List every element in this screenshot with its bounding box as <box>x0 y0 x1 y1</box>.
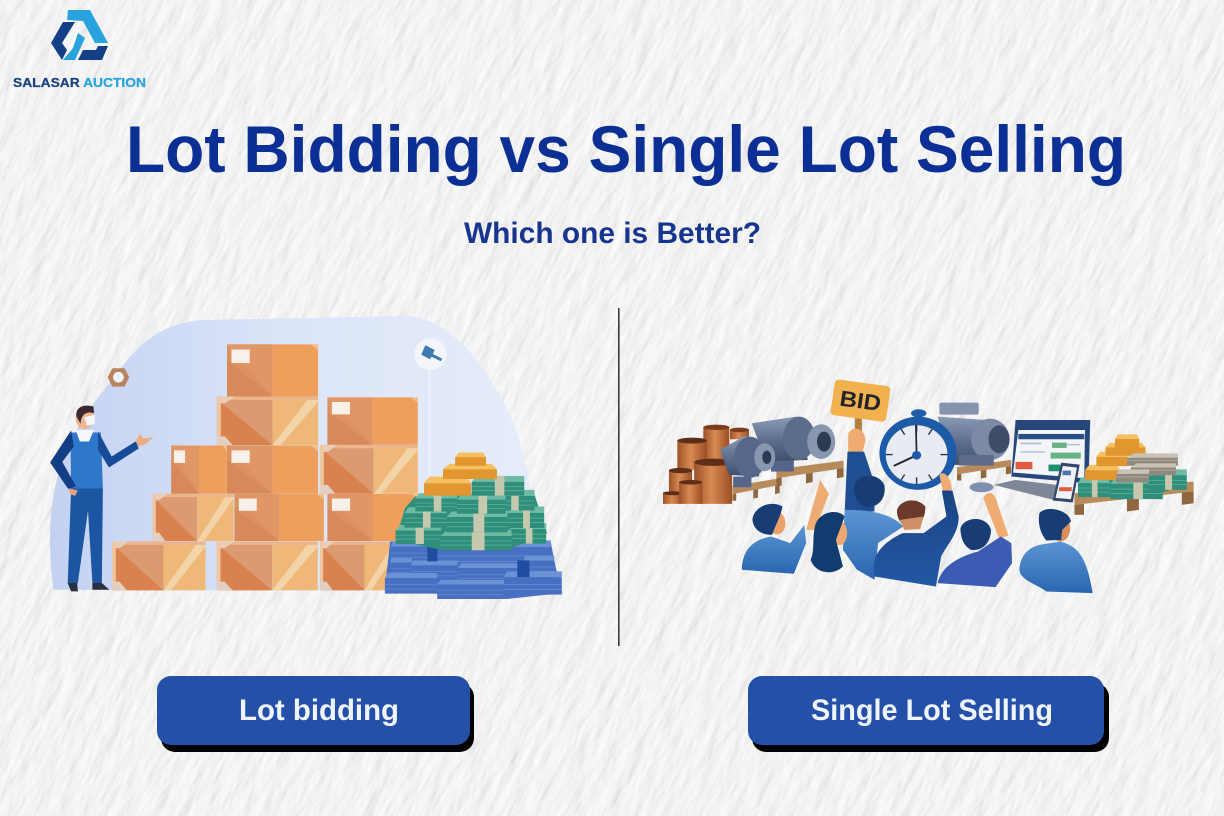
man presenting <box>50 406 154 591</box>
icon: logo mark <box>51 10 108 60</box>
title: Lot Bidding vs Single Lot Selling <box>126 112 1126 186</box>
metal motors <box>720 403 1010 487</box>
logo: Salasar Auction <box>13 10 146 90</box>
bidder: far left <box>742 480 829 574</box>
bidder: front with clock hand <box>874 473 959 586</box>
subtitle: Which one is Better? <box>464 217 761 250</box>
button: single lot selling <box>748 676 1109 752</box>
backdrop blob <box>50 316 530 590</box>
bidders crowd <box>742 429 1093 593</box>
logo wordmark: SALASAR AUCTION <box>13 76 146 90</box>
bidder: holding paddle <box>843 429 903 580</box>
button: lot bidding <box>157 676 474 752</box>
copper pipes <box>663 425 749 504</box>
laptop dashboard <box>970 420 1090 503</box>
bidder: far right <box>1019 509 1093 593</box>
green cash bundles <box>396 476 547 550</box>
clock <box>879 409 957 490</box>
illustration: single lot selling <box>663 379 1194 593</box>
pallets <box>732 460 1194 515</box>
icon: hex nut <box>108 368 129 387</box>
BID paddle text: BID <box>838 386 883 416</box>
bidder: right centre <box>938 493 1012 587</box>
stacked boxes <box>112 344 419 590</box>
button: single lot selling: Single Lot Selling <box>811 694 1053 727</box>
gold bars <box>424 453 497 496</box>
illustration: lot bidding <box>50 316 562 599</box>
bidder: woman <box>811 512 847 572</box>
icon: gavel on pole <box>414 338 447 480</box>
blue bundles <box>385 540 562 599</box>
divider <box>618 308 620 646</box>
button: lot bidding: Lot bidding <box>239 694 399 727</box>
raised bid paddle <box>830 379 891 438</box>
cash gold and silver pile <box>1078 434 1187 499</box>
